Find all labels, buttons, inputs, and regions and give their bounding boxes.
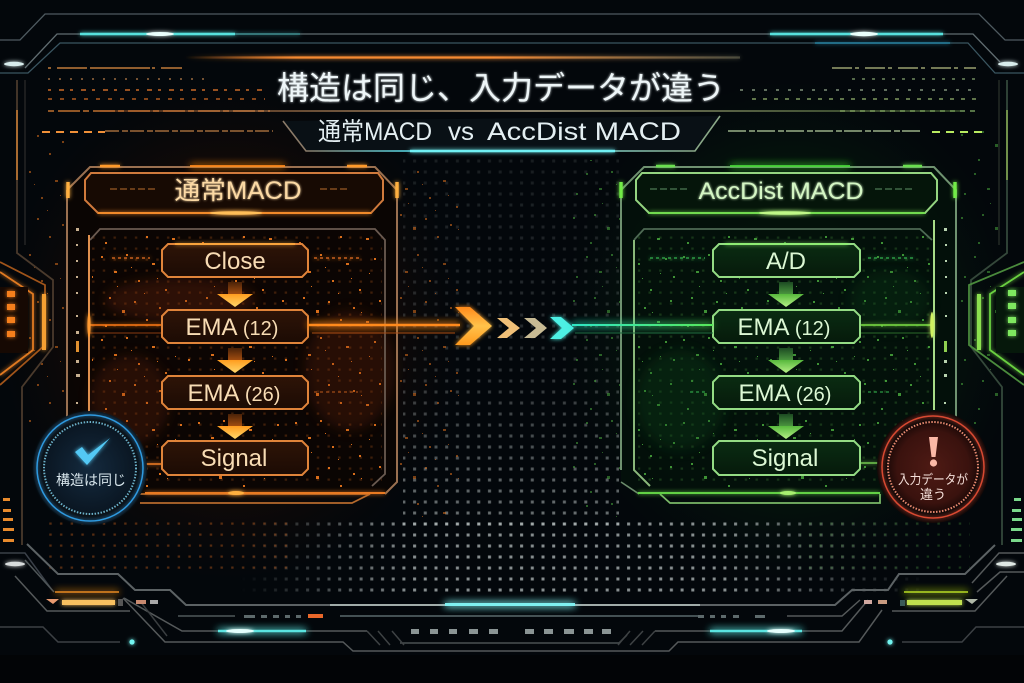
panel: 通常MACD xyxy=(67,166,397,503)
subtitle: AccDist MACD xyxy=(487,118,681,146)
subtitle: vs xyxy=(448,118,474,146)
status lights right xyxy=(1008,290,1016,336)
bottom indicator blocks xyxy=(244,614,765,634)
orange beam xyxy=(308,324,460,326)
step: Close xyxy=(162,244,308,277)
step: Close: Close xyxy=(204,248,266,275)
panel: AccDist MACD xyxy=(621,166,956,503)
bottom frame lines xyxy=(0,544,1024,651)
step: EMA 12 xyxy=(713,310,860,343)
arrow: Close to EMA 12 xyxy=(217,282,253,307)
step: EMA 12: EMA (12) xyxy=(186,314,278,341)
step: EMA 12: EMA (12) xyxy=(738,314,830,341)
teal beam xyxy=(572,324,713,326)
inner frame xyxy=(89,229,385,486)
badge label xyxy=(898,472,968,502)
right side hexagon ornament xyxy=(969,80,1024,545)
top frame lines xyxy=(0,14,1024,73)
subtitle plate xyxy=(283,116,720,151)
step: A/D: A/D xyxy=(766,248,806,275)
step: EMA 26 xyxy=(162,376,308,409)
heading: AccDist MACD xyxy=(698,178,864,205)
heading: 通常MACD xyxy=(174,177,302,205)
inner frame xyxy=(634,220,934,486)
subtitle: 通常MACD xyxy=(318,118,432,146)
panel inner texture xyxy=(90,232,395,487)
top cyan light bars xyxy=(4,32,1018,66)
arrow: EMA 26 to Signal xyxy=(217,414,253,439)
horizontal connector xyxy=(650,258,934,463)
chevron cyan xyxy=(550,317,574,339)
badge: 構造は同じ xyxy=(33,411,147,525)
subtitle xyxy=(318,118,681,146)
step: A/D xyxy=(713,244,860,277)
status bar right xyxy=(864,592,978,606)
chevron pale orange xyxy=(497,318,520,338)
side ticks xyxy=(76,228,80,404)
step: Signal: Signal xyxy=(201,445,267,472)
side ticks xyxy=(944,228,947,404)
arrow: EMA 12 to EMA 26 xyxy=(217,348,253,373)
header plate xyxy=(85,173,383,215)
title: 構造は同じ、入力データが違う xyxy=(277,70,725,106)
horizontal connector xyxy=(87,258,362,464)
header plate xyxy=(636,173,937,215)
badge label: 構造は同じ xyxy=(56,472,126,488)
bottom light accents xyxy=(5,562,1016,645)
left side hexagon ornament xyxy=(0,80,53,545)
step: EMA 26: EMA (26) xyxy=(739,380,831,407)
step: EMA 26 xyxy=(713,376,860,409)
badge label: 違う xyxy=(920,487,946,502)
orange arrowhead xyxy=(455,307,492,345)
panel inner texture xyxy=(635,232,930,487)
top data streams xyxy=(42,68,982,132)
icon: check mark xyxy=(75,438,110,465)
arrow: EMA 12 to EMA 26 xyxy=(768,348,804,373)
step: Signal xyxy=(162,441,308,475)
central transition arrow xyxy=(308,307,713,345)
step: Signal: Signal xyxy=(752,445,818,472)
step: EMA 12 xyxy=(162,310,308,343)
status lights left xyxy=(7,291,15,337)
dot matrix field xyxy=(28,130,998,596)
arrow: EMA 26 to Signal xyxy=(768,414,804,439)
step: Signal xyxy=(713,441,860,475)
badge: 入力データが違う xyxy=(877,411,989,523)
status bar left xyxy=(46,592,158,606)
step: EMA 26: EMA (26) xyxy=(188,380,280,407)
icon: exclamation xyxy=(929,437,938,467)
arrow: A/D to EMA 12 xyxy=(768,282,804,307)
chevron pale grey xyxy=(524,318,547,338)
badge label: 入力データが xyxy=(898,472,968,487)
